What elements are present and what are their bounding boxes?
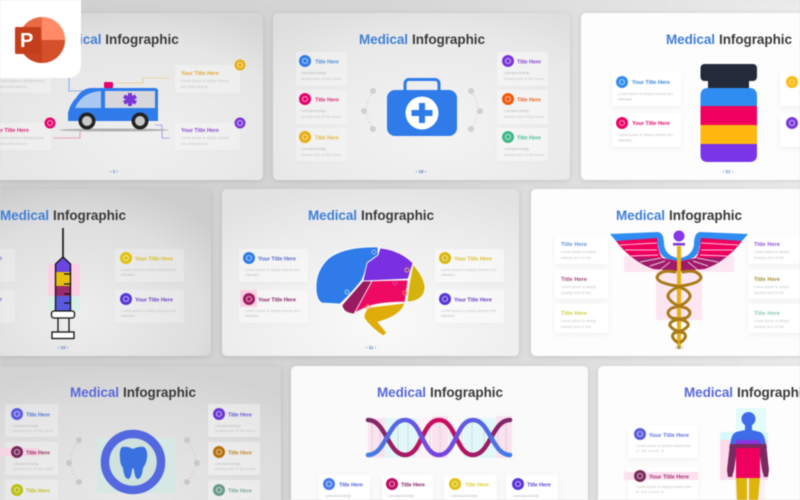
card: right 2: Lorem ipsum is simply <box>754 285 789 289</box>
card: left 3 <box>296 128 347 161</box>
connector arrows <box>54 77 170 138</box>
heading: brain slide <box>308 208 434 223</box>
card: bottom: of the lorem is <box>636 490 664 494</box>
heading: first aid slide: Medical <box>359 32 408 47</box>
card: left 1: Title Here <box>315 60 339 66</box>
card: right 2 <box>748 270 800 299</box>
heading: caduceus slide: Medical <box>616 208 665 223</box>
icon: syringe <box>48 228 80 338</box>
card: right 1: Lorem ipsum is simply <box>754 250 789 254</box>
heading: body slide: Medical <box>684 385 733 400</box>
heading: tooth slide: Medical <box>70 385 119 400</box>
card: left 2: Your Title Here <box>632 121 670 127</box>
icon: DNA helix <box>368 416 512 458</box>
heading: caduceus slide: Infographic <box>669 208 742 223</box>
card: right 3: Title Here <box>517 136 541 142</box>
card: right 3 <box>497 128 548 161</box>
card: left 3: Title Here <box>561 311 587 317</box>
heading: syringe slide: Medical <box>0 208 49 223</box>
card: top right: Your Title Here <box>181 71 219 77</box>
heading: bottle slide: Medical <box>666 32 715 47</box>
card: left 3: Lorem ipsum is simply <box>561 319 596 323</box>
card: bottom 2: Title Here <box>401 482 425 488</box>
card: left 1: Lorem ipsum is simply dummy text <box>245 268 300 272</box>
card: right 1 <box>208 404 260 437</box>
card: right 2 <box>208 442 260 475</box>
page number: ‹ 11 › <box>366 345 377 350</box>
card: left 1 <box>296 52 347 86</box>
panel: human body slide <box>598 366 800 500</box>
page number: ‹ 10 › <box>58 345 69 350</box>
card: left 2: Title Here <box>26 450 50 456</box>
card: right 1: Your Title Here <box>135 256 173 262</box>
card: left 1 <box>239 249 308 282</box>
dotted arcs <box>66 437 200 485</box>
card: right 1: of the lorem <box>121 273 135 277</box>
card: left 2 <box>555 270 608 299</box>
card: right 2: Lorem ipsum is simply <box>215 462 240 466</box>
card: right 1: Lorem ipsum is simply <box>215 424 240 428</box>
card: right 3: Lorem ipsum is simply <box>754 319 789 323</box>
panel: first aid slide <box>273 13 570 180</box>
card: right 1: dummy text of the lorem <box>504 77 544 81</box>
right wing <box>681 232 748 271</box>
card: left 3: Title Here <box>315 136 339 142</box>
icon: ambulance <box>59 82 169 132</box>
card: right 1: dummy text of the lorem <box>215 429 255 433</box>
card: bottom 3 <box>444 475 497 500</box>
heading: caduceus slide <box>616 208 742 223</box>
card: right 1 <box>435 249 504 282</box>
card: bottom right: text of the lorem is <box>181 142 208 146</box>
card: left 2 <box>0 442 58 475</box>
card: top right <box>175 60 246 93</box>
card: left 1 <box>5 404 58 437</box>
card: right 1: Title Here <box>517 60 541 66</box>
heading: DNA slide <box>377 385 503 400</box>
card: right 2: Lorem ipsum is simply <box>504 109 529 113</box>
card: right 2 <box>115 290 184 323</box>
icon: human body <box>720 408 769 500</box>
card: right 2: Lorem ipsum is simply dummy text <box>121 309 176 313</box>
card: left 1: dummy text of the lorem <box>301 77 341 81</box>
card: left 1: Your Title Here <box>632 80 670 86</box>
card: right 2: Title Here <box>754 277 780 283</box>
card: right 2: Your Title Here <box>135 298 173 304</box>
panel: DNA slide <box>291 366 588 500</box>
card: left 2: dummy text of the lorem <box>301 115 341 119</box>
heading: first aid slide: Infographic <box>412 32 485 47</box>
card: bottom: Your Title Here <box>649 474 689 480</box>
card: bottom right: Your Title Here <box>181 128 219 134</box>
card: left 1: Your Title Here <box>258 256 296 262</box>
card: right 1: of the lorem <box>441 273 455 277</box>
card: left 2: dummy text of the lorem <box>13 467 53 471</box>
card: top: Lorem ipsum is simply dummy text <box>636 444 691 448</box>
heading: first aid slide <box>359 32 485 47</box>
card: top right: text of the lorem is <box>181 85 208 89</box>
heading: tooth slide <box>70 385 196 400</box>
card: top left: text of the lorem is <box>0 85 27 89</box>
card: bottom 4: Title Here <box>527 482 551 488</box>
panel: caduceus slide <box>531 189 800 356</box>
heading: syringe slide <box>0 208 126 223</box>
staff <box>677 246 681 349</box>
card: top left: Lorem ipsum is simply dummy <box>0 79 45 83</box>
card: bottom 2: Lorem ipsum is simply <box>388 494 414 498</box>
page number: ‹ 18 › <box>416 169 427 174</box>
page number: ‹ 2 › <box>110 169 118 174</box>
card: left 1: dummy text of the <box>561 256 591 260</box>
heading: body slide <box>684 385 800 400</box>
card: bottom left <box>0 118 56 150</box>
heading: ambulance slide: ical Infographic <box>79 32 179 47</box>
card: left 2: dummy text of the <box>561 291 591 295</box>
icon: medicine bottle <box>700 64 757 162</box>
logo badge: PowerPoint <box>0 0 81 78</box>
card: right 1: Lorem ipsum is simply dummy text <box>441 268 496 272</box>
card: right 1: Title Here <box>754 242 780 248</box>
card: bottom <box>624 467 698 500</box>
card: bottom: Lorem ipsum is simply dummy text <box>636 485 691 489</box>
card: right 3: dummy text of the lorem <box>504 153 544 157</box>
card: top right: Lorem ipsum is simply dummy <box>181 79 229 83</box>
card: right 3: Lorem ipsum is simply <box>504 147 529 151</box>
card: right 3 <box>208 480 260 500</box>
card: right 2: Lorem ipsum is simply dummy text <box>441 309 496 313</box>
page number: ‹ 8 › <box>675 345 683 350</box>
heading: syringe slide: Infographic <box>53 208 126 223</box>
card: right 1: Your Title Here <box>454 256 492 262</box>
card: right 2: of the lorem <box>441 314 455 318</box>
icon: first aid kit <box>387 80 457 136</box>
card: left 2: Lorem ipsum is simply <box>301 109 326 113</box>
card: right 2: dummy text of the <box>754 291 784 295</box>
card: top <box>628 426 698 458</box>
card: bottom left: Lorem ipsum is simply dummy <box>0 136 45 140</box>
icon: tooth <box>97 434 175 493</box>
card: left 2: of the lorem <box>245 314 259 318</box>
card: right 2: dummy text of the lorem <box>504 115 544 119</box>
heading: DNA slide: Infographic <box>430 385 503 400</box>
card: right 2 <box>780 113 800 147</box>
card: left 3: Title Here <box>26 488 50 494</box>
panel: syringe slide <box>0 189 211 356</box>
card: right 1: Title Here <box>228 412 252 418</box>
card: bottom 4 <box>506 475 558 500</box>
card: right 2: Title Here <box>517 98 541 104</box>
card: left 2: Lorem ipsum is simply <box>561 285 596 289</box>
card: bottom 3: Lorem ipsum is simply <box>451 494 477 498</box>
card: left 1: Title Here <box>26 412 50 418</box>
card: right 1 <box>780 72 800 106</box>
card: right 1 <box>115 249 184 282</box>
page number: ‹ 21 › <box>723 169 734 174</box>
heading: tooth slide: Infographic <box>123 385 196 400</box>
icon: PowerPoint logo: P <box>20 30 33 52</box>
card: right 3 <box>748 304 800 333</box>
card: left 2 <box>612 113 681 147</box>
card: bottom left: text of the lorem is <box>0 142 27 146</box>
card: left 1: of the lorem <box>245 273 259 277</box>
card: left 1: Lorem ipsum is simply <box>561 250 596 254</box>
card: left 2 <box>296 90 347 124</box>
panel: ambulance slide <box>0 13 263 180</box>
card: left 3 <box>555 304 608 333</box>
left wing <box>610 232 677 271</box>
card: left 1: Lorem ipsum is simply dummy text <box>618 92 673 96</box>
card: left 2: Lorem ipsum is simply <box>13 462 38 466</box>
heading: brain slide: Medical <box>308 208 357 223</box>
card: right 3: Title Here <box>228 488 252 494</box>
panel: medicine bottle slide <box>581 13 800 180</box>
card: top left <box>0 65 51 93</box>
panel: brain slide <box>222 189 519 356</box>
card: top: of the lorem is <box>636 449 664 453</box>
card: left 1 <box>0 249 15 282</box>
icon: caduceus <box>610 230 748 349</box>
card: left 3: dummy text of the lorem <box>301 153 341 157</box>
card: left 1: Lorem ipsum is simply <box>13 424 38 428</box>
icon: brain <box>316 247 425 336</box>
card: right 2: Title Here <box>228 450 252 456</box>
card: left 2 <box>239 290 308 323</box>
heading: DNA slide: Medical <box>377 385 426 400</box>
serpents <box>657 271 701 342</box>
card: right 2: Your Title Here <box>454 298 492 304</box>
card: left 1: of the lorem <box>618 98 632 102</box>
card: left 1: Lorem ipsum is simply <box>301 71 326 75</box>
heading: bottle slide: Infographic <box>719 32 792 47</box>
card: right 2: of the lorem <box>121 314 135 318</box>
card: left 2: Title Here <box>561 277 587 283</box>
card: top: Your Title Here <box>649 433 689 439</box>
card: left 3 <box>5 480 58 500</box>
dotted arcs <box>361 88 483 132</box>
card: right 1: dummy text of the <box>754 256 784 260</box>
card: left 1 <box>612 72 681 106</box>
card: left 1 <box>555 235 608 264</box>
card: bottom 4: Lorem ipsum is simply <box>513 494 539 498</box>
card: right 2 <box>435 290 504 323</box>
card: bottom 2 <box>382 475 433 500</box>
card: right 1: Lorem ipsum is simply <box>504 71 529 75</box>
card: right 1 <box>497 52 548 86</box>
card: bottom 1: Lorem ipsum is simply <box>325 494 351 498</box>
card: left 1: Title Here <box>561 242 587 248</box>
card: right 3: Title Here <box>754 311 780 317</box>
card: left 2: Lorem ipsum is simply dummy text <box>618 133 673 137</box>
card: right 2 <box>497 90 548 124</box>
card: left 2: Title Here <box>315 98 339 104</box>
card: bottom right <box>175 118 246 150</box>
card: right 2: dummy text of the lorem <box>215 467 255 471</box>
card: left 3: Lorem ipsum is simply <box>301 147 326 151</box>
card: right 3: dummy text of the <box>754 325 784 329</box>
heading: brain slide: Infographic <box>361 208 434 223</box>
card: bottom 1 <box>319 475 370 500</box>
card: left 3: dummy text of the <box>561 325 591 329</box>
card: bottom 1: Title Here <box>339 482 363 488</box>
card: left 2: of the lorem <box>618 138 632 142</box>
card: left 2: Lorem ipsum is simply dummy text <box>245 309 300 313</box>
card: bottom right: Lorem ipsum is simply dummy <box>181 136 229 140</box>
card: left 2: Your Title Here <box>258 298 296 304</box>
panel: tooth slide <box>0 366 281 500</box>
card: bottom 3: Title Here <box>465 482 489 488</box>
card: left 2 <box>0 290 15 323</box>
card: left 1: dummy text of the lorem <box>13 429 53 433</box>
card: right 1: Lorem ipsum is simply dummy text <box>121 268 176 272</box>
card: right 1 <box>748 235 800 264</box>
heading: bottle slide <box>666 32 792 47</box>
